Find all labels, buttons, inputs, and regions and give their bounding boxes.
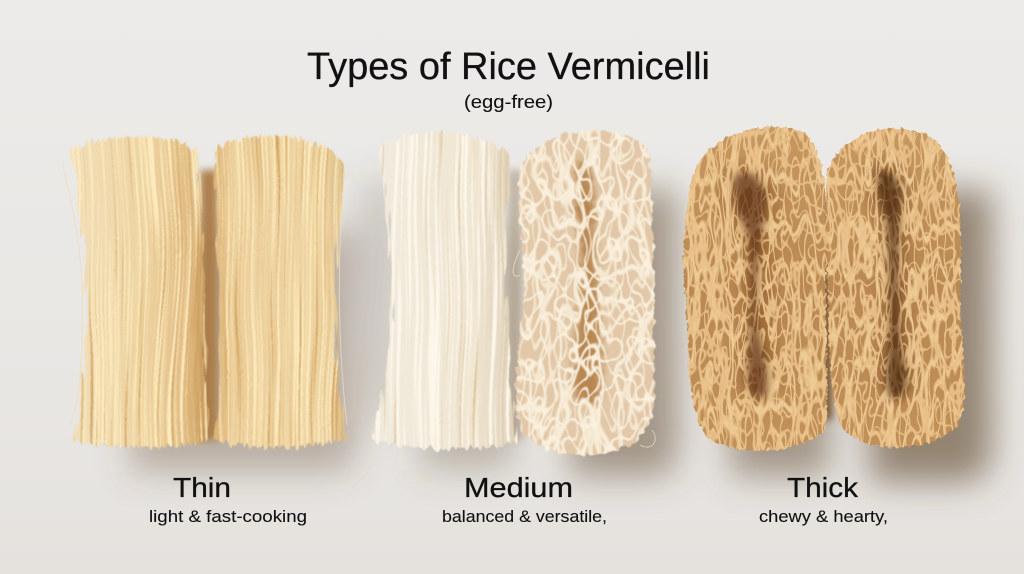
gap shadow between noodle bundles xyxy=(200,170,832,440)
thin stray strands xyxy=(63,165,347,425)
thick name: Thick xyxy=(787,472,859,503)
thick bundle right xyxy=(826,128,964,447)
medium nest hollow xyxy=(572,160,601,404)
thick left hollow halo xyxy=(722,165,780,402)
thick left base xyxy=(683,127,827,451)
thin bundle left xyxy=(72,137,208,447)
thin name: Thin xyxy=(173,472,231,503)
noodle group: medium xyxy=(370,130,655,455)
medium nest loose loops xyxy=(513,250,655,447)
cast shadows xyxy=(130,180,992,483)
label: thick xyxy=(759,472,888,526)
thick description: chewy & hearty, xyxy=(759,508,888,526)
thick hole left xyxy=(733,172,768,398)
thick bundle left xyxy=(683,127,827,451)
subtitle: (egg-free) xyxy=(464,92,553,112)
label: thin xyxy=(149,472,307,526)
label: medium xyxy=(442,472,607,526)
thick hole right xyxy=(877,171,907,398)
noodle group: thick xyxy=(683,127,964,451)
noodle group: thin xyxy=(63,136,347,448)
medium bundle left xyxy=(370,132,518,449)
title: Types of Rice Vermicelli xyxy=(307,46,710,88)
medium description: balanced & versatile, xyxy=(442,508,607,526)
thin bundle right xyxy=(213,136,345,448)
thick right hollow halo xyxy=(867,161,915,401)
medium name: Medium xyxy=(464,472,573,503)
medium nest base xyxy=(516,130,654,455)
medium bundle right xyxy=(516,130,654,455)
thick right base xyxy=(826,128,964,447)
thin description: light & fast-cooking xyxy=(149,508,307,526)
